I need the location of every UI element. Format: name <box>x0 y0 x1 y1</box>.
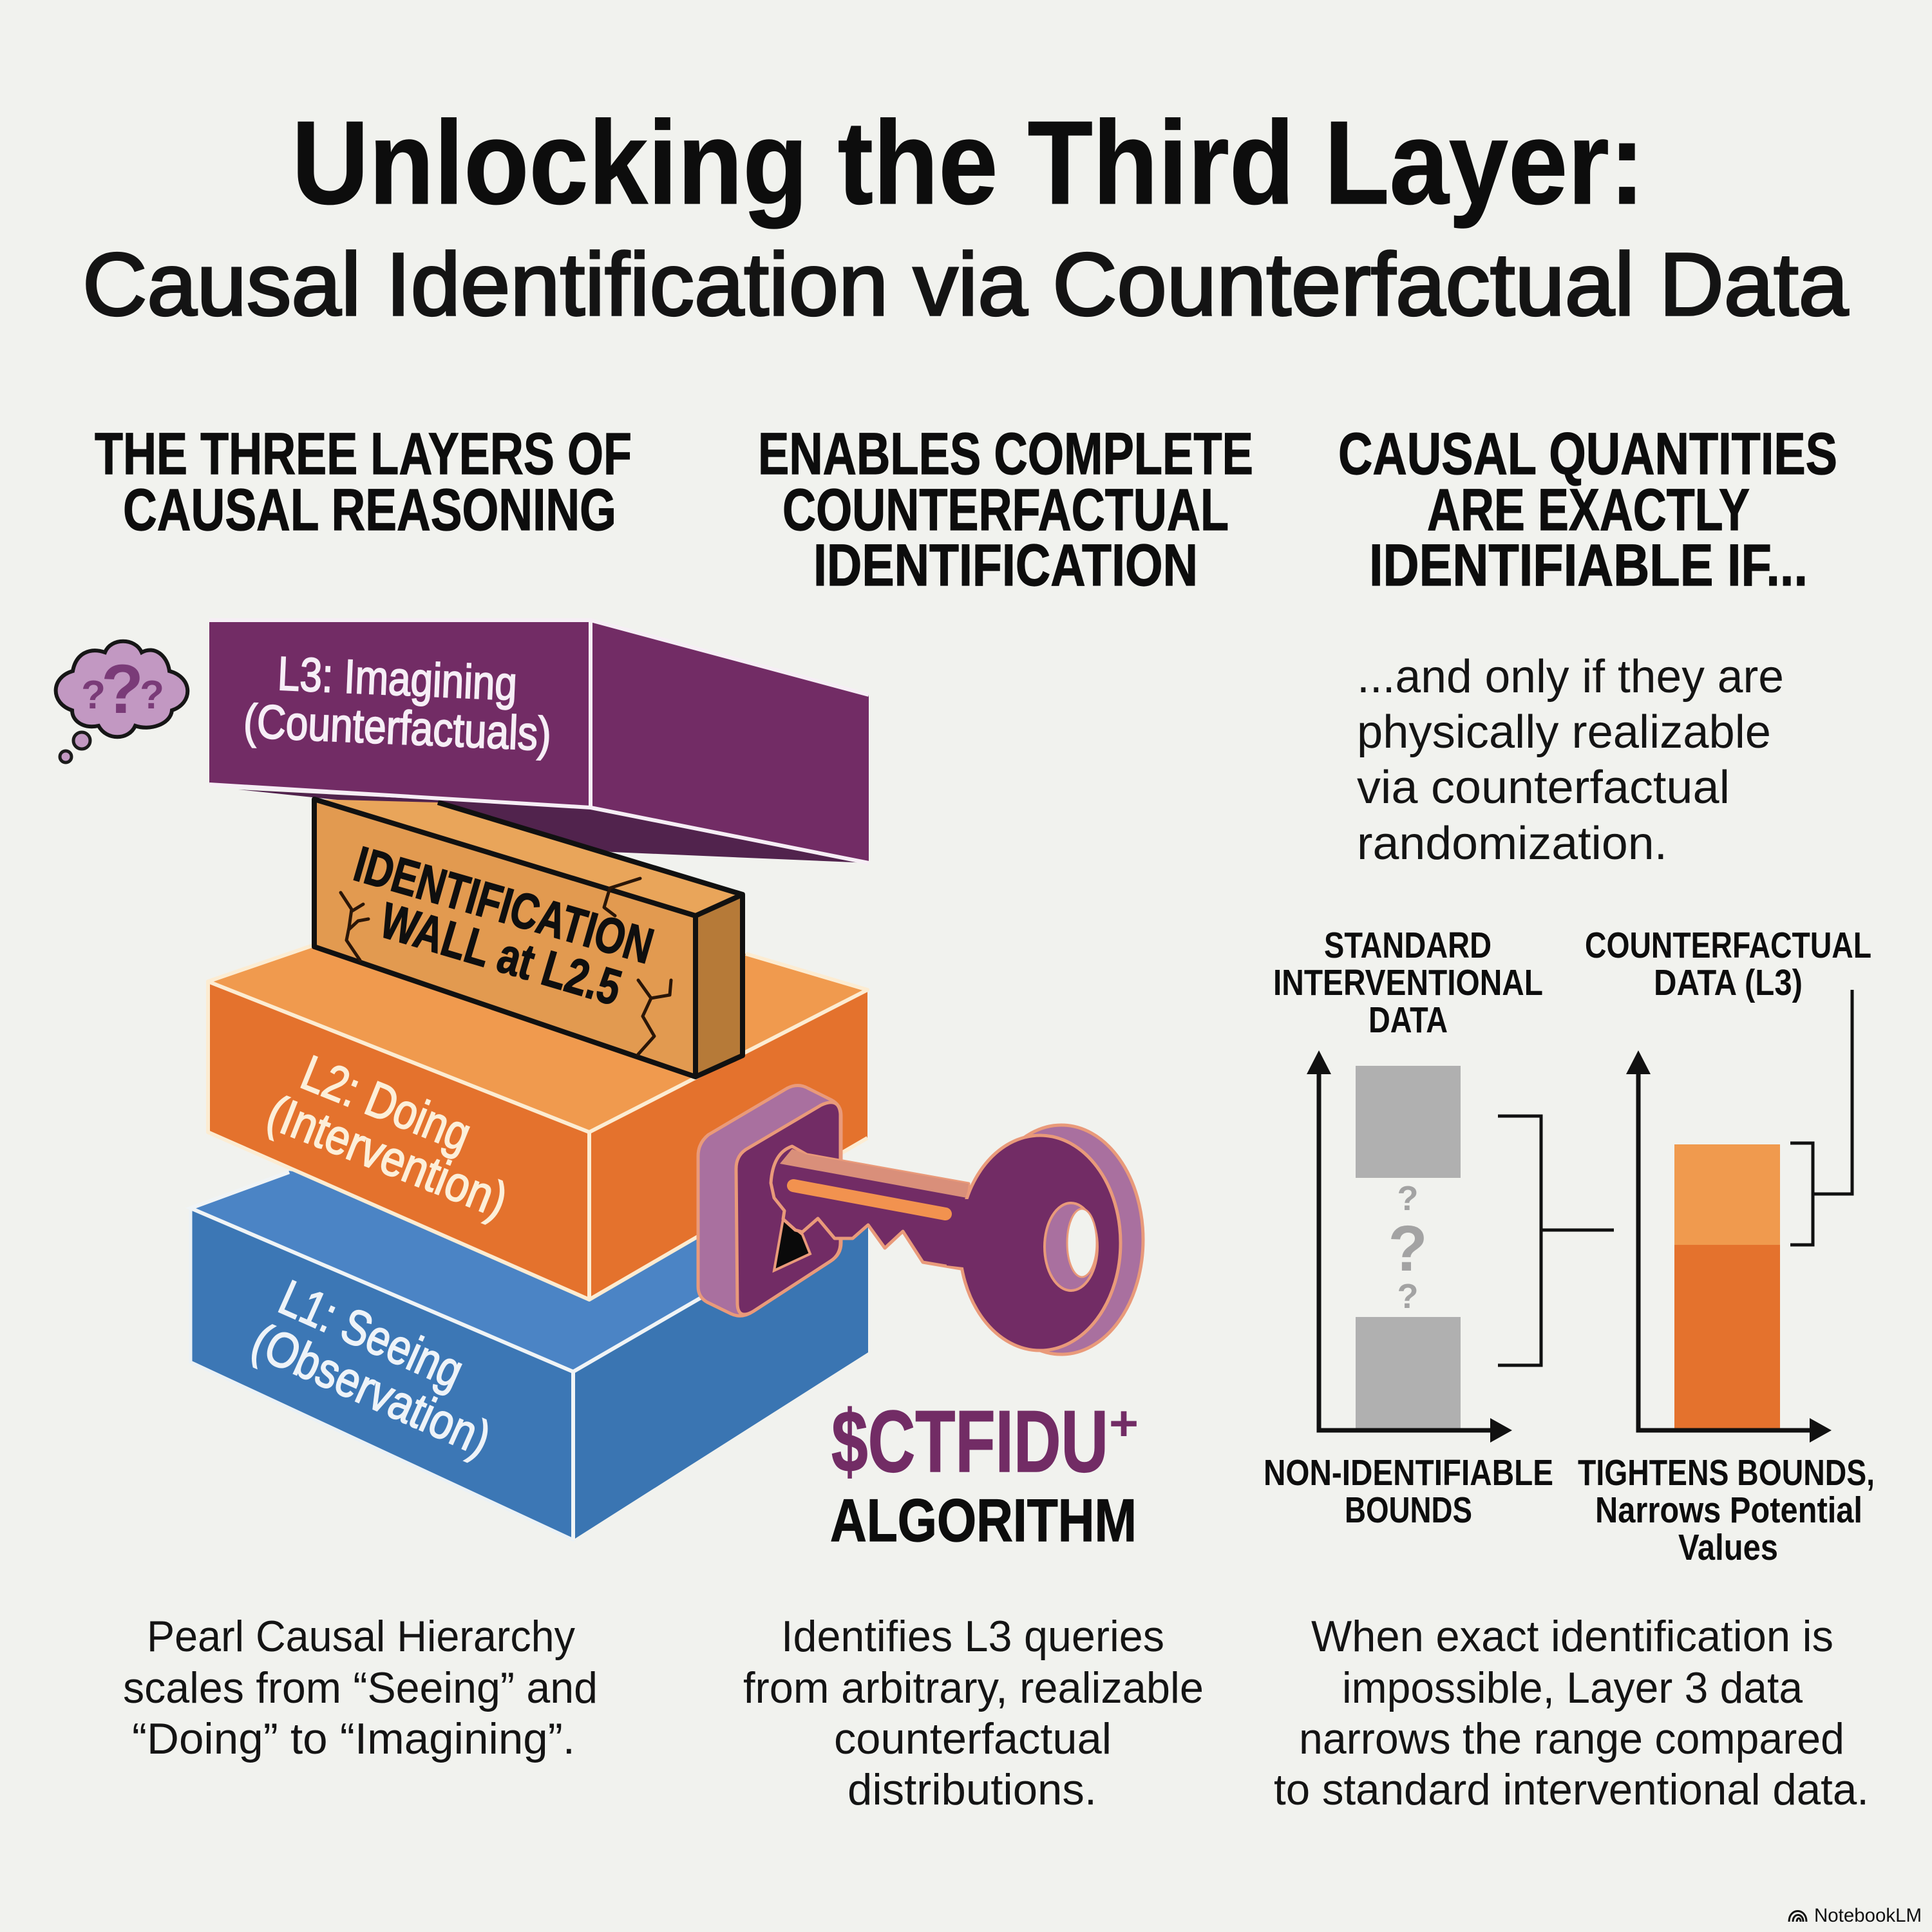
chart title: STANDARD <box>1324 925 1492 966</box>
heading: complete identification: ENABLES COMPLETE <box>758 421 1253 487</box>
text block: narrows the range: impossible, Layer 3 data <box>1342 1663 1803 1712</box>
question marks: ? <box>1397 1277 1418 1316</box>
text block: identifies L3 queries: counterfactual <box>834 1714 1112 1763</box>
chart caption: Values <box>1678 1527 1778 1568</box>
chart title: INTERVENTIONAL <box>1273 962 1543 1003</box>
title <box>82 96 1848 334</box>
heading: exactly identifiable: IDENTIFIABLE IF... <box>1369 533 1808 598</box>
chart title: DATA (L3) <box>1654 962 1803 1003</box>
key shaft <box>771 1146 969 1270</box>
question marks <box>1388 1179 1428 1316</box>
icon: thought cloud <box>56 641 187 762</box>
text block: narrows the range: When exact identification is <box>1311 1612 1833 1661</box>
bracket <box>1790 990 1852 1245</box>
text block: Pearl hierarchy: scales from “Seeing” and <box>123 1663 598 1712</box>
label: L1: L1: Seeing <box>271 1270 471 1399</box>
chart title: COUNTERFACTUAL <box>1585 925 1871 966</box>
cracks <box>341 878 671 1054</box>
gray bounds <box>1356 1066 1461 1430</box>
label: L1: (Observation) <box>244 1313 498 1467</box>
heading: three layers: THE THREE LAYERS OF <box>95 421 632 487</box>
text block: identifies L3 queries: Identifies L3 queries <box>781 1612 1164 1661</box>
chart caption: NON-IDENTIFIABLE <box>1264 1452 1553 1493</box>
icon: thought cloud: ? <box>81 673 106 717</box>
icon: thought cloud: ? <box>140 673 164 717</box>
label: L1 <box>244 1270 498 1467</box>
text block: narrows the range <box>1274 1612 1869 1814</box>
chart caption: TIGHTENS BOUNDS, <box>1578 1452 1875 1493</box>
bracket <box>1498 1116 1614 1365</box>
key hole <box>1045 1203 1097 1291</box>
text block: identifies L3 queries: distributions. <box>848 1765 1097 1814</box>
block: L3 imagining <box>209 620 869 863</box>
question marks: ? <box>1388 1213 1428 1285</box>
key head front <box>960 1135 1121 1350</box>
chart title <box>1273 925 1543 1041</box>
chart caption <box>1264 1452 1553 1531</box>
chart caption <box>1578 1452 1875 1568</box>
label: algorithm name: ALGORITHM <box>830 1486 1137 1554</box>
keyhole <box>774 1219 810 1271</box>
heading: complete identification: IDENTIFICATION <box>813 533 1198 598</box>
text block: physically realizable: randomization. <box>1357 818 1667 869</box>
label: L2 <box>260 1045 515 1229</box>
subtitle: Causal Identification via Counterfactual Data <box>82 235 1848 334</box>
chart caption: BOUNDS <box>1345 1490 1472 1531</box>
label: wall text: WALL at L2.5 <box>374 891 628 1016</box>
chart title: DATA <box>1368 999 1448 1041</box>
label: L3 <box>243 647 553 761</box>
text block: physically realizable: physically realizable <box>1357 706 1771 758</box>
brand: NotebookLM: NotebookLM <box>1814 1905 1922 1926</box>
text block: physically realizable <box>1357 651 1784 869</box>
icon: key <box>771 1125 1143 1354</box>
block: L2 doing <box>208 945 867 1300</box>
label: L2: L2: Doing <box>294 1045 478 1162</box>
text block: Pearl hierarchy: “Doing” to “Imagining”. <box>132 1714 575 1763</box>
label: algorithm name: + <box>1109 1396 1139 1451</box>
label: algorithm name <box>830 1392 1139 1554</box>
heading: exactly identifiable <box>1338 421 1837 598</box>
axes <box>1307 1050 1512 1443</box>
label: algorithm name: $CTFIDU <box>831 1392 1108 1490</box>
heading: exactly identifiable: ARE EXACTLY <box>1427 477 1750 543</box>
chart: standard interventional data <box>1264 925 1614 1531</box>
icon: thought cloud: ? <box>101 650 144 728</box>
orange bar <box>1674 1144 1780 1430</box>
chart title <box>1585 925 1871 1003</box>
text block: narrows the range: to standard interventional data. <box>1274 1765 1869 1814</box>
block underside: L3 shadow <box>238 790 869 863</box>
text block: identifies L3 queries: from arbitrary, realizable <box>743 1663 1204 1712</box>
heading: three layers: CAUSAL REASONING <box>123 477 616 543</box>
title: Unlocking the Third Layer: <box>292 96 1645 229</box>
block: L1 seeing <box>191 1159 868 1540</box>
text block: Pearl hierarchy: Pearl Causal Hierarchy <box>147 1612 575 1661</box>
heading: complete identification <box>758 421 1253 598</box>
label: L3: L3: Imagining <box>276 647 518 710</box>
label: wall text: IDENTIFICATION <box>348 835 659 974</box>
wall: identification wall <box>314 799 743 1077</box>
chart caption: Narrows Potential <box>1595 1490 1862 1531</box>
heading: three layers <box>95 421 632 543</box>
label: L2: (Intervention) <box>260 1084 515 1229</box>
text block: physically realizable: via counterfactual <box>1357 762 1730 813</box>
icon: lock plate <box>698 1086 841 1316</box>
text block: identifies L3 queries <box>743 1612 1204 1814</box>
heading: complete identification: COUNTERFACTUAL <box>782 477 1229 543</box>
chart: counterfactual data <box>1578 925 1875 1568</box>
key head back <box>980 1125 1143 1354</box>
question marks: ? <box>1397 1179 1418 1218</box>
text block: narrows the range: narrows the range compared <box>1299 1714 1844 1763</box>
text block: physically realizable: ...and only if they are <box>1357 651 1784 703</box>
label: L3: (Counterfactuals) <box>243 694 553 761</box>
text block: Pearl hierarchy <box>123 1612 598 1763</box>
axes <box>1626 1050 1832 1443</box>
